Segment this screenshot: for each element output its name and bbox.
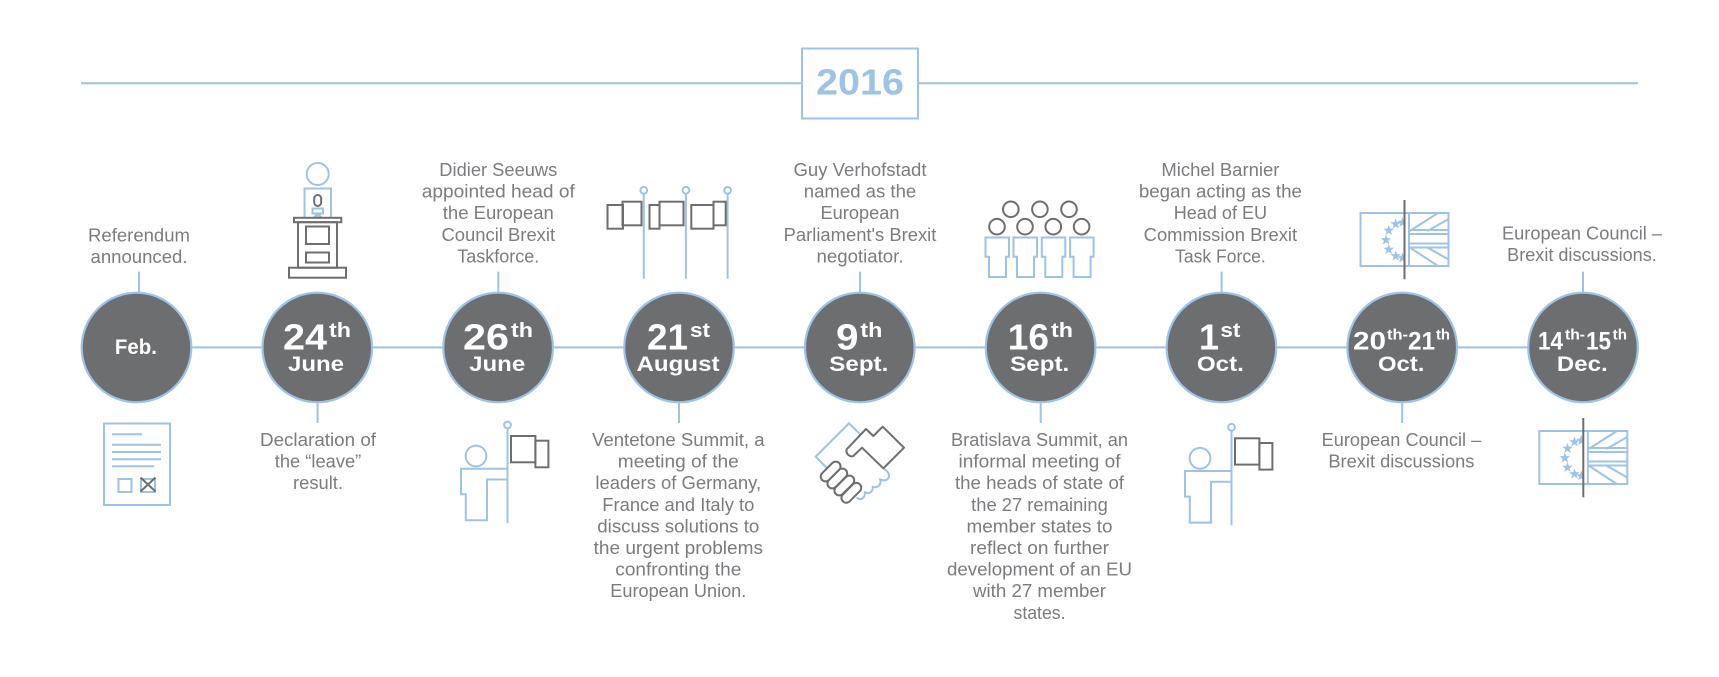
text: Bratislava Summit [947, 430, 1132, 623]
text: Bratislava Summit: informal meeting of [958, 452, 1122, 472]
milestone: 9th Sept: 9 [836, 316, 858, 357]
icon: person with flag [461, 422, 548, 523]
milestone: 1st Oct: 1 [1199, 316, 1219, 357]
icon: split EU and UK flag [1360, 200, 1448, 279]
year badge: 2016: 2016 [816, 62, 904, 102]
text: European Council, Brexit discussions: European Council – [1322, 430, 1481, 450]
milestone: 9th Sept [805, 272, 915, 402]
text: Ventetone Summit: meeting of the [618, 452, 739, 472]
icon: person with flag [1185, 424, 1272, 525]
milestone: 1st Oct: st [1220, 320, 1241, 342]
text: Ventetone Summit: the urgent problems [594, 538, 763, 558]
text: European Council, Brexit discussions [1322, 430, 1481, 472]
text: Michel Barnier: Commission Brexit [1144, 225, 1297, 245]
milestone: 1st Oct: Oct. [1197, 353, 1244, 376]
text: Ventetone Summit: leaders of Germany, [595, 473, 761, 493]
timeline axis [136, 346, 1583, 348]
milestone: 24th June: June [288, 353, 344, 376]
text: Michel Barnier [1139, 160, 1302, 266]
milestone: 14th-15th Dec: th- [1565, 326, 1585, 344]
text: Michel Barnier: began acting as the [1139, 182, 1302, 202]
milestone: 20th-21st Oct: th [1436, 326, 1450, 344]
text: Guy Verhofstadt: named as the [804, 182, 916, 202]
text: Michel Barnier: Task Force. [1175, 246, 1266, 266]
text: European Council, Brexit discussions: European Council – [1502, 223, 1662, 243]
text: Didier Seeuws: appointed head of [422, 182, 576, 202]
icon: three flags [608, 187, 731, 279]
text: Didier Seeuws [422, 160, 576, 266]
text: Michel Barnier: Head of EU [1174, 203, 1267, 223]
text: Didier Seeuws: the European [443, 203, 554, 223]
text: Ventetone Summit [592, 430, 766, 601]
milestone: 9th Sept: th [860, 320, 882, 342]
year header line [81, 82, 1638, 84]
text: European Council, Brexit discussions [1502, 223, 1662, 265]
milestone: 16th Sept: th [1051, 320, 1073, 342]
milestone: 20th-21st Oct: 21 [1408, 327, 1435, 355]
text: Guy Verhofstadt: Parliament's Brexit [784, 225, 936, 245]
text: Bratislava Summit: the heads of state of [955, 473, 1125, 493]
milestone: February [82, 272, 191, 402]
icon: handshake [816, 423, 904, 505]
text: Referendum announced: Referendum [88, 226, 190, 246]
year badge: 2016 [802, 48, 918, 118]
text: Ventetone Summit: Ventetone Summit, a [592, 430, 766, 450]
icon: ballot paper [104, 424, 170, 505]
milestone: 1st Oct [1167, 272, 1276, 402]
milestone: February: Feb. [115, 336, 157, 359]
text: Michel Barnier: Michel Barnier [1161, 160, 1279, 180]
milestone: 21st August [624, 293, 734, 423]
milestone: 20th-21st Oct: th- [1387, 326, 1408, 344]
text: Ventetone Summit: France and Italy to [602, 495, 754, 515]
text: Ventetone Summit: confronting the [615, 560, 741, 580]
text: Declaration of the leave result: result. [293, 473, 343, 493]
milestone: 26th June: June [469, 353, 525, 376]
milestone: 16th Sept: 16 [1008, 316, 1049, 357]
text: Declaration of the leave result [260, 430, 377, 493]
milestone: 16th Sept: Sept. [1010, 353, 1069, 376]
milestone: 14th-15th Dec: 15 [1586, 327, 1611, 355]
milestone: 14th-15th Dec [1528, 272, 1638, 402]
milestone: 14th-15th Dec: th [1613, 326, 1627, 344]
text: Bratislava Summit: reflect on further [970, 538, 1109, 558]
text: Ventetone Summit: discuss solutions to [597, 516, 759, 536]
text: Declaration of the leave result: Declaration of [260, 430, 377, 450]
text: Didier Seeuws: Taskforce. [457, 246, 539, 266]
icon: speaker at podium [289, 163, 346, 278]
milestone: 20th-21st Oct: Oct. [1378, 353, 1424, 376]
milestone: 20th-21st Oct: 20 [1353, 327, 1386, 355]
text: Guy Verhofstadt [784, 160, 936, 266]
text: Didier Seeuws: Didier Seeuws [439, 160, 557, 180]
milestone: 16th Sept [986, 293, 1095, 423]
milestone: 24th June: th [329, 320, 351, 342]
text: Guy Verhofstadt: negotiator. [816, 246, 904, 266]
milestone: 26th June [443, 272, 553, 402]
milestone: 14th-15th Dec: Dec. [1557, 353, 1608, 376]
text: Guy Verhofstadt: European [820, 203, 900, 223]
milestone: 21st August: st [690, 320, 710, 342]
milestone: 9th Sept: Sept. [829, 353, 888, 376]
icon: split EU and UK flag [1539, 418, 1627, 497]
milestone: 20th-21st Oct [1347, 293, 1457, 423]
text: Bratislava Summit: member states to [966, 516, 1112, 536]
text: Referendum announced [88, 226, 190, 267]
text: Ventetone Summit: European Union. [610, 581, 746, 601]
text: Guy Verhofstadt: Guy Verhofstadt [794, 160, 926, 180]
milestone: 21st August: August [636, 353, 720, 376]
text: European Council, Brexit discussions: Brexit discussions [1328, 452, 1474, 472]
text: Didier Seeuws: Council Brexit [442, 225, 555, 245]
text: Bratislava Summit: Bratislava Summit, an [951, 430, 1128, 450]
text: Bratislava Summit: the 27 remaining [971, 495, 1108, 515]
text: Declaration of the leave result: the “leave” [275, 452, 361, 472]
milestone: 26th June: 26 [463, 316, 509, 357]
text: Bratislava Summit: development of an EU [947, 560, 1132, 580]
milestone: 24th June [262, 293, 372, 423]
milestone: 26th June: th [511, 320, 533, 342]
text: Bratislava Summit: states. [1014, 603, 1066, 623]
milestone: 21st August: 21 [647, 316, 688, 357]
text: Referendum announced: announced. [90, 247, 188, 267]
milestone: 14th-15th Dec: 14 [1538, 327, 1563, 355]
milestone: 24th June: 24 [283, 316, 327, 357]
icon: group of people [986, 202, 1094, 277]
text: European Council, Brexit discussions: Brexit discussions. [1507, 245, 1657, 265]
text: Bratislava Summit: with 27 member [972, 581, 1106, 601]
